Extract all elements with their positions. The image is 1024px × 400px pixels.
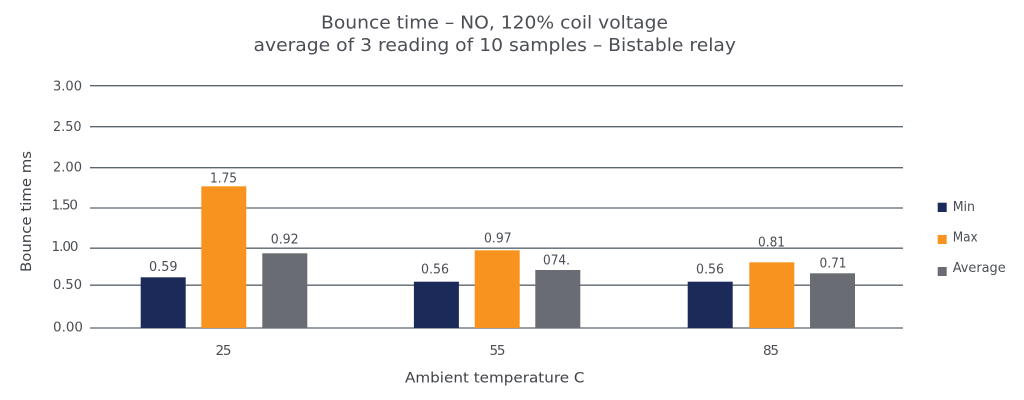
y axis labels: 3.00 <box>53 78 82 94</box>
value labels: 074. <box>543 252 570 268</box>
y axis labels: 1.50 <box>52 198 78 214</box>
x axis category labels: 55 <box>490 343 506 359</box>
y axis title: Bounce time ms <box>19 151 35 272</box>
legend: Average <box>953 260 1006 276</box>
x axis title: Ambient temperature C <box>405 370 584 386</box>
title: average of 3 reading of 10 samples – Bistable relay <box>254 36 736 56</box>
value labels: 0.81 <box>758 235 785 251</box>
x axis category labels: 85 <box>763 343 779 359</box>
y axis labels: 1.00 <box>52 239 78 255</box>
x axis category labels: 25 <box>216 343 232 359</box>
bars: group 85 <box>688 262 855 328</box>
value labels: 0.92 <box>271 231 299 247</box>
bars: group 55 <box>414 250 580 328</box>
y axis labels: 0.50 <box>53 277 82 293</box>
legend: Max <box>953 230 978 246</box>
value labels: 0.97 <box>484 231 512 247</box>
value labels: 0.59 <box>149 259 178 275</box>
legend: Min <box>953 199 975 215</box>
bars: group 25 <box>141 186 307 328</box>
y axis labels: 0.00 <box>53 320 83 336</box>
value labels: 0.56 <box>696 261 724 277</box>
title <box>254 13 736 56</box>
value labels: 0.71 <box>820 255 846 271</box>
legend <box>938 199 1006 276</box>
y axis labels: 2.00 <box>53 160 82 176</box>
value labels <box>149 170 846 277</box>
x axis category labels <box>216 343 779 359</box>
value labels: 0.56 <box>421 261 449 277</box>
value labels: 1.75 <box>210 170 237 186</box>
y axis labels <box>52 78 83 336</box>
y axis labels: 2.50 <box>53 119 82 135</box>
title: Bounce time – NO, 120% coil voltage <box>321 13 668 33</box>
